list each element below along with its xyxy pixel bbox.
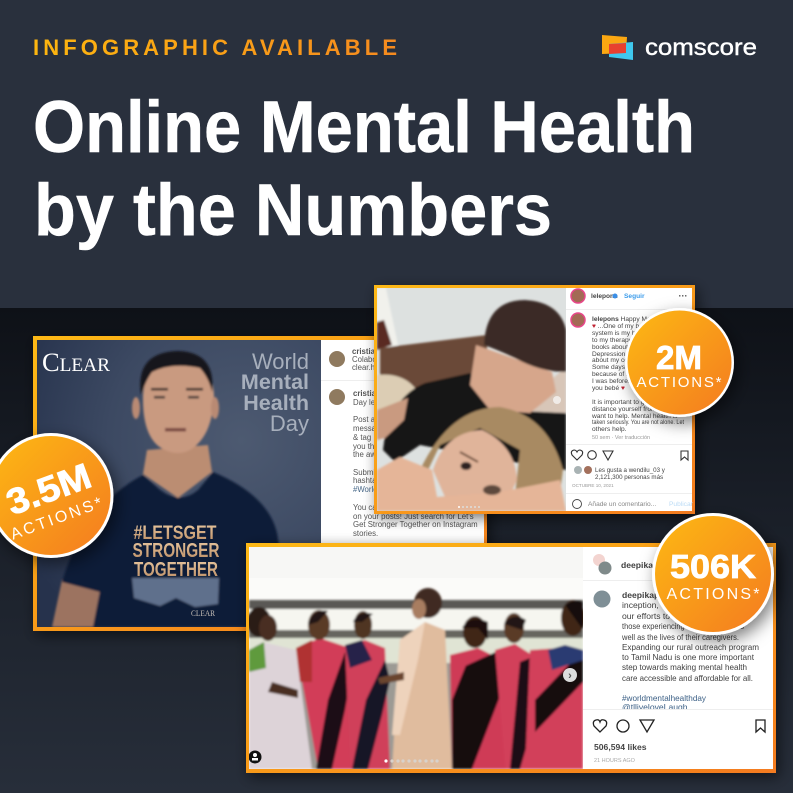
post sidebar text: Colabora xyxy=(352,355,384,364)
eyebrow heading: INFOGRAPHIC AVAILABLE xyxy=(33,35,397,60)
post sidebar: ♥ ...One of my b xyxy=(592,323,639,330)
black shirt xyxy=(383,373,566,470)
badge: 2M actions xyxy=(625,308,734,417)
woman 3 xyxy=(345,640,390,769)
photo: man in shirt xyxy=(37,340,321,627)
badge: 3.5M actions: 3.5M xyxy=(1,455,96,523)
post sidebar: Seguir xyxy=(624,293,645,300)
post sidebar text: Day let xyxy=(353,398,378,407)
post sidebar: Publicar xyxy=(669,501,694,508)
post sidebar: Some days an xyxy=(592,364,634,371)
badge: 2M actions: ACTIONS* xyxy=(636,374,722,391)
post sidebar: you bebé ♥ xyxy=(592,385,625,392)
post sidebar: inception, we have strengthened xyxy=(622,600,746,610)
panel: Deepika post xyxy=(246,543,776,773)
post sidebar: to Tamil Nadu is one more important xyxy=(622,652,755,662)
photo: group of women xyxy=(247,547,585,769)
post sidebar: to my therapy s xyxy=(592,337,638,344)
post sidebar: 2,121,300 personas más xyxy=(595,474,663,481)
post sidebar: It is important to ge xyxy=(592,399,648,406)
icons: like, comment, share, save xyxy=(571,450,688,460)
post sidebar text: hashta xyxy=(353,476,377,485)
icon: comscore logo xyxy=(602,35,633,60)
post sidebar: 50 sem · Ver traducción xyxy=(592,435,650,441)
post sidebar text: messag xyxy=(353,424,380,433)
shirt text: TOGETHER xyxy=(134,559,218,581)
woman 2 xyxy=(296,638,352,769)
photo caption: World Mental Health Day xyxy=(241,349,309,436)
post sidebar text: Post a xyxy=(353,415,376,424)
photo: man in shirt: CLEAR xyxy=(191,609,216,618)
post sidebar: deepikapadukone xyxy=(621,560,694,570)
woman's hair xyxy=(420,407,563,495)
woman 5 xyxy=(450,648,512,769)
panel: Lele Pons post xyxy=(374,285,695,514)
post sidebar: 506,594 likes xyxy=(594,742,647,752)
panel: Clear / Cristiano post xyxy=(33,336,487,631)
post sidebar: 21 HOURS AGO xyxy=(594,758,636,764)
post sidebar text: & tag xyxy=(353,433,371,442)
post sidebar: because of hi xyxy=(592,371,632,378)
photo caption: World Mental Health Day: World xyxy=(252,349,309,374)
brand logo on photo: CLEAR xyxy=(42,348,110,377)
post sidebar text: stories. xyxy=(353,529,378,538)
post sidebar: distance yourself from xyxy=(592,406,657,413)
post sidebar: ··· xyxy=(678,291,688,301)
cream pillow xyxy=(377,372,416,410)
man's hair xyxy=(484,300,566,372)
badge: 506K actions: ACTIONS* xyxy=(666,586,760,603)
right pillow xyxy=(532,370,566,415)
brand name: comscore xyxy=(645,34,757,60)
post sidebar: our efforts to improve the lives of xyxy=(622,611,747,621)
post sidebar: I was before. I' xyxy=(592,378,635,385)
post sidebar text: Submit xyxy=(353,468,378,477)
post sidebar text: on your posts! Just search for Let's xyxy=(353,512,474,521)
post sidebar: want to help. Mental health is xyxy=(591,413,678,420)
post sidebar xyxy=(566,289,694,508)
badge: 506K actions: 506K xyxy=(670,548,756,585)
post sidebar: about my con xyxy=(592,357,632,364)
woman 7 xyxy=(525,648,583,769)
arm xyxy=(377,398,408,440)
post sidebar: deepikapadukone xyxy=(622,590,695,600)
headboard xyxy=(380,335,487,390)
background: top band xyxy=(0,0,793,308)
badge: 3.5M actions: ACTIONS* xyxy=(8,495,104,543)
shirt text xyxy=(133,526,220,576)
post sidebar text: Get Stronger Together on Instagram xyxy=(353,520,478,529)
post sidebar xyxy=(583,554,773,764)
background: lower dark band xyxy=(0,308,793,793)
woman 4 centre xyxy=(392,622,452,769)
post sidebar: books about O xyxy=(592,344,635,351)
post sidebar text: #World xyxy=(353,485,378,494)
post sidebar: Depression so xyxy=(592,351,634,358)
photo caption: World Mental Health Day: Health xyxy=(243,391,309,415)
post sidebar: taken seriously. You are not alone. Let xyxy=(592,419,684,426)
post sidebar text: clear.ha xyxy=(352,363,380,372)
post sidebar text: cristiano xyxy=(352,347,385,356)
title: by the Numbers xyxy=(34,170,552,251)
woman 6 xyxy=(493,642,532,769)
woman's face xyxy=(433,430,517,497)
post sidebar: care accessible and affordable for all. xyxy=(622,673,753,683)
post sidebar text: cristiano xyxy=(353,389,386,398)
post sidebar: lelepons Happy Ment xyxy=(592,316,656,323)
post sidebar: step towards making mental health xyxy=(622,662,747,672)
woman 1 xyxy=(249,642,312,769)
post sidebar: #worldmentalhealthday xyxy=(622,693,707,703)
icons: like, comment, share, save xyxy=(593,720,765,732)
post sidebar text xyxy=(321,347,484,538)
post sidebar: well as the lives of their caregivers. xyxy=(621,632,739,642)
post sidebar text: You ca xyxy=(353,503,377,512)
post sidebar: system is my boyf xyxy=(592,330,645,337)
badge: 506K actions xyxy=(652,513,774,635)
shirt text: #LETSGET xyxy=(134,523,217,544)
photo: group of women: › xyxy=(568,670,572,682)
man's face xyxy=(470,345,556,413)
post sidebar: others help. xyxy=(592,426,627,433)
fist and arm xyxy=(377,457,566,511)
badge: 2M actions: 2M xyxy=(656,339,702,376)
post sidebar text: you th xyxy=(353,442,374,451)
photo: couple xyxy=(377,288,566,511)
post sidebar: OCTUBRE 10, 2021 xyxy=(572,483,614,488)
post sidebar: lelepons xyxy=(591,293,618,300)
shirt text: STRONGER xyxy=(132,540,220,562)
post sidebar: @tlliveloveLaugh xyxy=(622,702,688,712)
post sidebar: Expanding our rural outreach program xyxy=(622,642,759,652)
post sidebar: those experiencing mental illness, as xyxy=(622,621,744,631)
title xyxy=(33,87,695,251)
post sidebar: Les gusta a wendilu_03 y xyxy=(595,467,666,474)
photo caption: World Mental Health Day: Day xyxy=(270,411,309,436)
badge: 3.5M actions xyxy=(0,433,114,558)
post sidebar: Añade un comentario... xyxy=(588,501,656,508)
post sidebar text: the aw xyxy=(353,450,376,459)
photo caption: World Mental Health Day: Mental xyxy=(241,370,309,394)
title: Online Mental Health xyxy=(33,87,695,168)
